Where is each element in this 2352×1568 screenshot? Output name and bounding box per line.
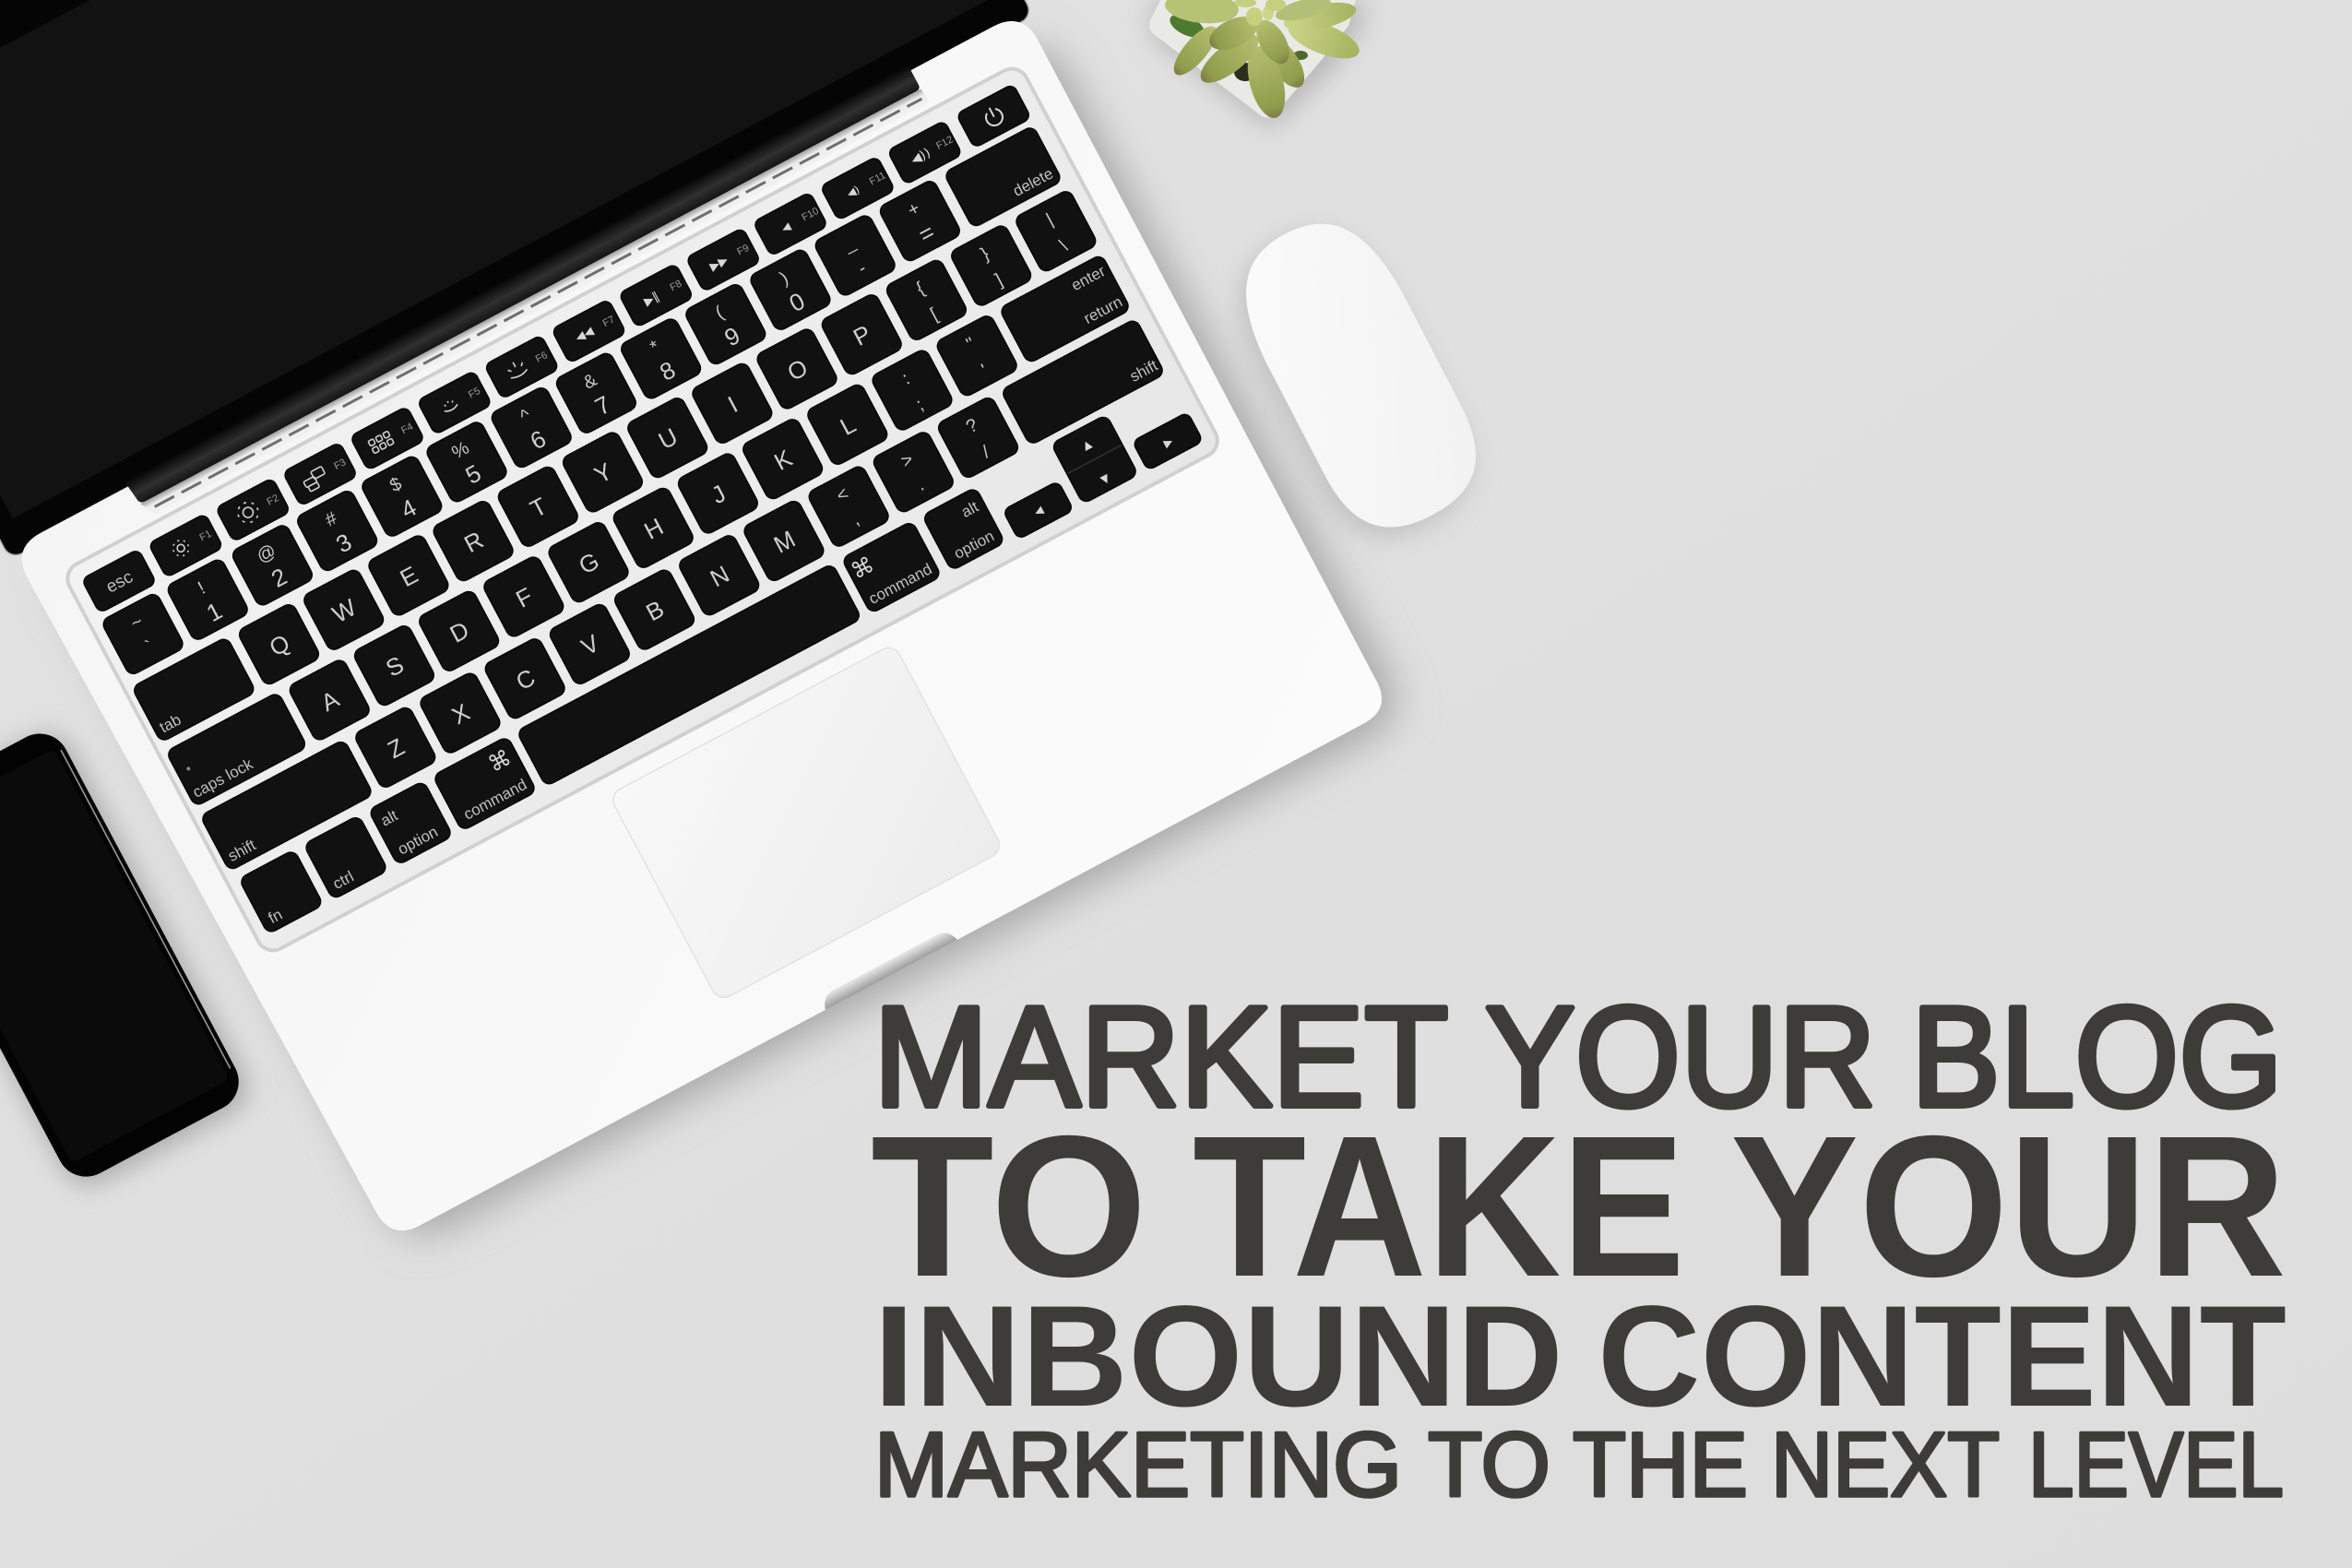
function key row: F8	[668, 279, 683, 293]
function key row: F4	[399, 422, 415, 436]
function key row: F6	[534, 350, 550, 365]
number key row: !	[195, 578, 208, 599]
shift key row: X	[447, 698, 474, 730]
function key row: ◀))	[909, 146, 933, 168]
home key row: S	[381, 650, 409, 683]
home key row: :	[899, 369, 913, 389]
function key row: F12	[934, 134, 956, 152]
title line 4: MARKETING	[874, 1413, 1402, 1515]
shift key row: Z	[383, 732, 409, 764]
function key row: F9	[735, 243, 751, 258]
title line 4: TO	[1428, 1413, 1550, 1515]
space bar row: command	[460, 776, 529, 824]
number key row: #	[322, 507, 341, 530]
shift key row: .	[913, 475, 927, 495]
space bar row: ▲	[1080, 436, 1094, 452]
QWERTY key row: I	[723, 390, 742, 418]
space bar row: ◀	[1032, 503, 1046, 518]
home key row: J	[707, 480, 731, 509]
title line 2: TO	[871, 1095, 1147, 1319]
shift key row	[200, 318, 1165, 872]
function key row: ▶‖	[642, 290, 662, 309]
title line 1: YOUR	[1485, 977, 1876, 1136]
space bar row: ▼	[1099, 470, 1112, 486]
phone screen	[0, 748, 230, 1163]
QWERTY key row: Y	[589, 457, 617, 489]
shift key row: /	[979, 442, 993, 462]
title line 4	[874, 1413, 2284, 1515]
function key row: ◀◀	[574, 325, 596, 346]
QWERTY key row: ]	[992, 270, 1006, 291]
home key row: ;	[913, 395, 927, 415]
QWERTY key row: |	[1043, 209, 1057, 230]
number key row: delete	[1010, 164, 1056, 200]
function key row	[81, 84, 1031, 613]
title line 1: BLOG	[1911, 977, 2283, 1136]
number key row	[101, 125, 1063, 676]
function key row: ▶▶	[707, 253, 731, 274]
home key row: '	[979, 361, 991, 380]
number key row: =	[914, 218, 939, 249]
space bar row	[237, 380, 1203, 937]
home key row: H	[639, 513, 668, 545]
number key row: &	[580, 370, 600, 394]
mouse body	[1218, 198, 1500, 551]
space bar row: option	[395, 823, 441, 859]
function key row: ◀)	[845, 183, 861, 200]
QWERTY key row: Q	[265, 628, 294, 661]
home key row: G	[575, 547, 603, 580]
QWERTY key row: [	[927, 304, 942, 325]
space bar row: command	[866, 560, 935, 608]
smartphone	[0, 721, 256, 1194]
number key row: 1	[202, 597, 227, 627]
function key row: F1	[198, 529, 214, 543]
number key row: $	[386, 474, 405, 496]
moss and soil	[1167, 9, 1308, 81]
shift key row: shift	[1127, 356, 1161, 386]
home key row: L	[836, 410, 861, 441]
number key row: ~	[127, 612, 147, 635]
number key row: `	[142, 636, 158, 658]
function key row: F11	[868, 170, 887, 187]
home key row: enter	[1068, 262, 1109, 294]
number key row: +	[904, 198, 923, 221]
number key row: 8	[655, 356, 680, 386]
title line 4: LEVEL	[2028, 1413, 2284, 1515]
keyboard	[76, 84, 1203, 940]
shift key row: C	[511, 663, 540, 695]
title text block	[871, 977, 2287, 1515]
space bar row: ⌘	[847, 552, 878, 585]
QWERTY key row: \	[1057, 235, 1071, 256]
space bar row: ctrl	[330, 868, 357, 893]
home key row: D	[445, 616, 473, 648]
QWERTY key row: R	[459, 526, 488, 558]
phone body	[0, 723, 249, 1187]
function key row: F5	[467, 386, 482, 401]
QWERTY key row: W	[327, 593, 361, 628]
white pot	[1149, 0, 1356, 118]
shift key row: >	[897, 449, 917, 472]
shift key row: shift	[225, 836, 259, 865]
space bar row: option	[951, 527, 997, 563]
mouse shadow	[1212, 208, 1494, 560]
number key row: 5	[461, 458, 485, 490]
function key row: F7	[601, 314, 617, 329]
number key row: 7	[590, 390, 615, 421]
phone shadow	[0, 725, 256, 1194]
number key row: 4	[396, 493, 421, 524]
QWERTY key row: tab	[157, 711, 184, 736]
home key row: A	[316, 684, 344, 717]
number key row: 6	[526, 424, 551, 455]
number key row: *	[647, 337, 663, 358]
number key row: _	[839, 232, 859, 255]
succulent leaves	[1164, 0, 1364, 122]
title line 3	[873, 1277, 2287, 1437]
QWERTY key row: O	[783, 353, 813, 386]
title line 2: TAKE	[1193, 1095, 1685, 1319]
home key row: F	[511, 582, 537, 613]
function key row: F10	[800, 206, 821, 223]
title line 1: MARKET	[873, 977, 1448, 1136]
pot shadow	[1153, 0, 1365, 129]
QWERTY key row: E	[396, 560, 422, 592]
plant in white pot	[1149, 0, 1365, 129]
shift key row: V	[576, 629, 604, 661]
shift key row: <	[833, 483, 852, 506]
number key row: ^	[517, 405, 534, 427]
shift key row: ?	[963, 415, 981, 437]
function key row: ◀	[779, 220, 793, 235]
shift key row: M	[769, 525, 800, 559]
QWERTY key row: T	[526, 492, 552, 523]
space bar	[517, 564, 861, 787]
number key row: 0	[785, 287, 809, 317]
function key row: F3	[332, 457, 348, 472]
title line 2	[871, 1095, 2287, 1319]
number key row: 9	[719, 321, 744, 351]
trackpad	[609, 644, 1004, 1002]
space bar row: ▶	[1161, 434, 1175, 450]
function key row: F2	[265, 493, 280, 508]
home key row: caps lock	[190, 754, 256, 802]
laptop screen	[0, 0, 988, 518]
laptop shadow	[49, 36, 1408, 1245]
space bar row: alt	[378, 806, 401, 830]
title line 4: THE	[1573, 1413, 1748, 1515]
title line 3: INBOUND	[873, 1277, 1563, 1437]
space bar row: alt	[958, 498, 981, 521]
home key row: K	[769, 444, 797, 476]
space bar row: fn	[266, 906, 285, 927]
laptop	[0, 0, 1408, 1260]
number key row: -	[855, 258, 870, 279]
keyboard well	[62, 63, 1223, 956]
home key row	[166, 254, 1131, 807]
number key row: (	[712, 303, 728, 324]
wireless mouse	[1209, 198, 1503, 560]
front thumb notch	[819, 928, 957, 1010]
laptop deck	[12, 11, 1393, 1245]
shift key row: ,	[849, 509, 862, 529]
laptop lid	[0, 0, 1033, 560]
number key row: %	[448, 438, 473, 463]
shift key row: B	[641, 595, 669, 626]
shift key row: N	[706, 560, 734, 592]
title line 4: NEXT	[1771, 1413, 2000, 1515]
number key row: 3	[331, 528, 356, 558]
QWERTY key row: {	[913, 279, 928, 299]
phone edge highlight	[61, 750, 231, 1068]
title line 1	[873, 977, 2283, 1136]
number key row: )	[777, 268, 792, 289]
QWERTY key row: P	[849, 319, 875, 351]
QWERTY key row: U	[654, 422, 682, 455]
number key row: 2	[267, 562, 291, 593]
QWERTY key row	[132, 189, 1099, 742]
space bar row: ⌘	[484, 744, 516, 778]
hinge vent	[140, 89, 930, 517]
title line 2: YOUR	[1730, 1095, 2287, 1319]
number key row: @	[254, 540, 279, 567]
hinge bar	[125, 65, 921, 505]
QWERTY key row: }	[978, 244, 992, 265]
home key row: return	[1081, 292, 1125, 327]
home key row: "	[963, 334, 979, 355]
title line 3: CONTENT	[1598, 1277, 2287, 1437]
function key row: esc	[103, 567, 137, 598]
